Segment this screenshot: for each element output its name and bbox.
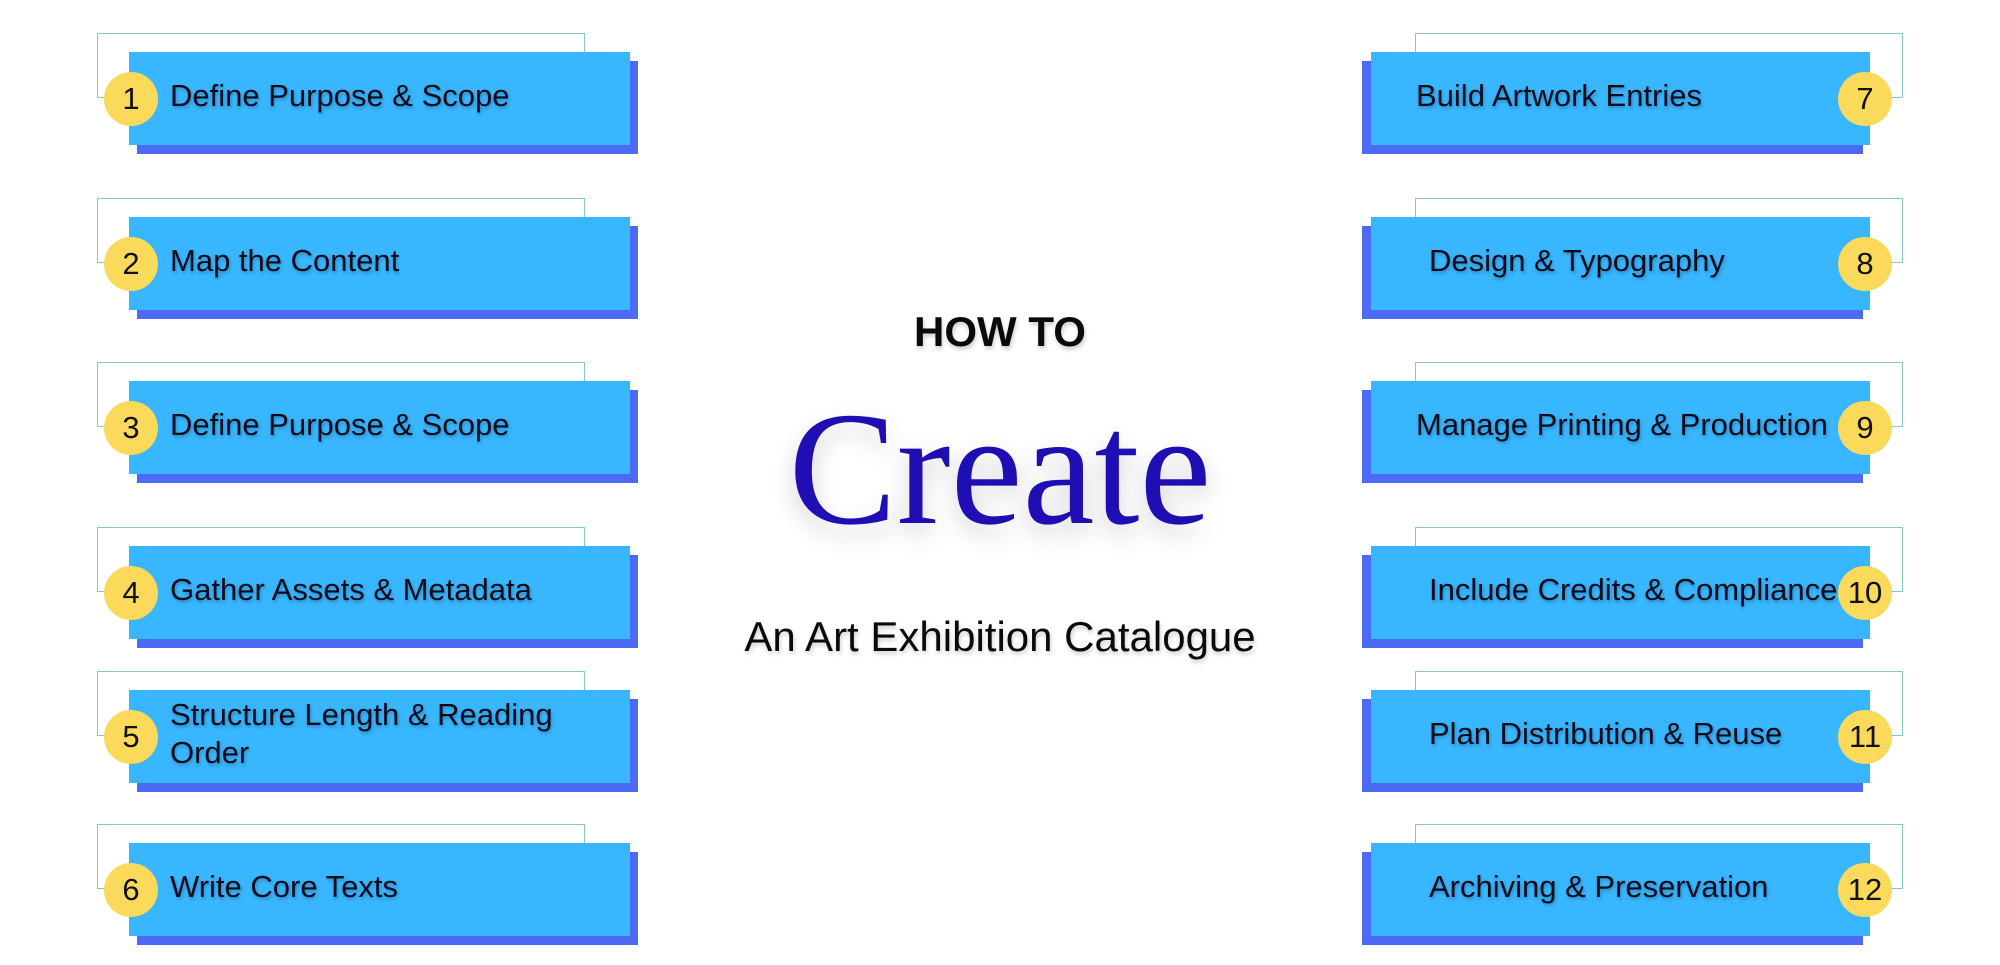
label 7: Build Artwork Entries (1416, 78, 1702, 112)
step 3 (97, 362, 638, 483)
label 2: Map the Content (170, 242, 399, 278)
step 8 (1362, 198, 1903, 319)
number 4 (104, 566, 158, 620)
step 5 (97, 671, 638, 792)
label 11: Plan Distribution & Reuse (1429, 716, 1782, 750)
number 6: 6 (122, 872, 140, 907)
title: create: Create (789, 380, 1211, 559)
label 3: Define Purpose & Scope (170, 406, 510, 442)
step 9 (1362, 362, 1903, 483)
number 2 (104, 237, 158, 291)
label 12: Archiving & Preservation (1429, 868, 1768, 904)
subtitle: An Art Exhibition Catalogue (744, 613, 1256, 660)
step 2 (97, 198, 638, 319)
step 6 (97, 824, 638, 945)
label 5: Structure Length & Reading Order (170, 696, 553, 770)
step 12 (1362, 824, 1903, 945)
number 5: 5 (122, 719, 140, 754)
number 12 (1838, 863, 1892, 917)
step 7 (1362, 33, 1903, 154)
number 11: 11 (1849, 719, 1881, 754)
number 12: 12 (1848, 872, 1882, 907)
number 4: 4 (122, 575, 140, 610)
number 7: 7 (1856, 81, 1874, 116)
number 9: 9 (1856, 410, 1874, 445)
step 1 (97, 33, 638, 154)
label 1: Define Purpose & Scope (170, 78, 510, 112)
number 2: 2 (122, 246, 140, 281)
number 6 (104, 863, 158, 917)
step 4 (97, 527, 638, 648)
number 7 (1838, 72, 1892, 126)
label 8: Design & Typography (1429, 242, 1725, 278)
step 11 (1362, 671, 1903, 792)
label 4: Gather Assets & Metadata (170, 572, 532, 606)
label 9: Manage Printing & Production (1416, 406, 1828, 442)
label 6: Write Core Texts (170, 868, 398, 904)
label 10: Include Credits & Compliance (1429, 572, 1837, 606)
number 8 (1838, 237, 1892, 291)
number 3: 3 (122, 410, 140, 445)
number 8: 8 (1856, 246, 1874, 281)
number 10: 10 (1848, 575, 1882, 610)
number 5 (104, 710, 158, 764)
number 3 (104, 401, 158, 455)
step 10 (1362, 527, 1903, 648)
number 9 (1838, 401, 1892, 455)
number 10 (1838, 566, 1892, 620)
heading: how to: HOW TO (914, 308, 1086, 355)
number 1 (104, 72, 158, 126)
number 1: 1 (122, 81, 140, 116)
number 11 (1838, 710, 1892, 764)
